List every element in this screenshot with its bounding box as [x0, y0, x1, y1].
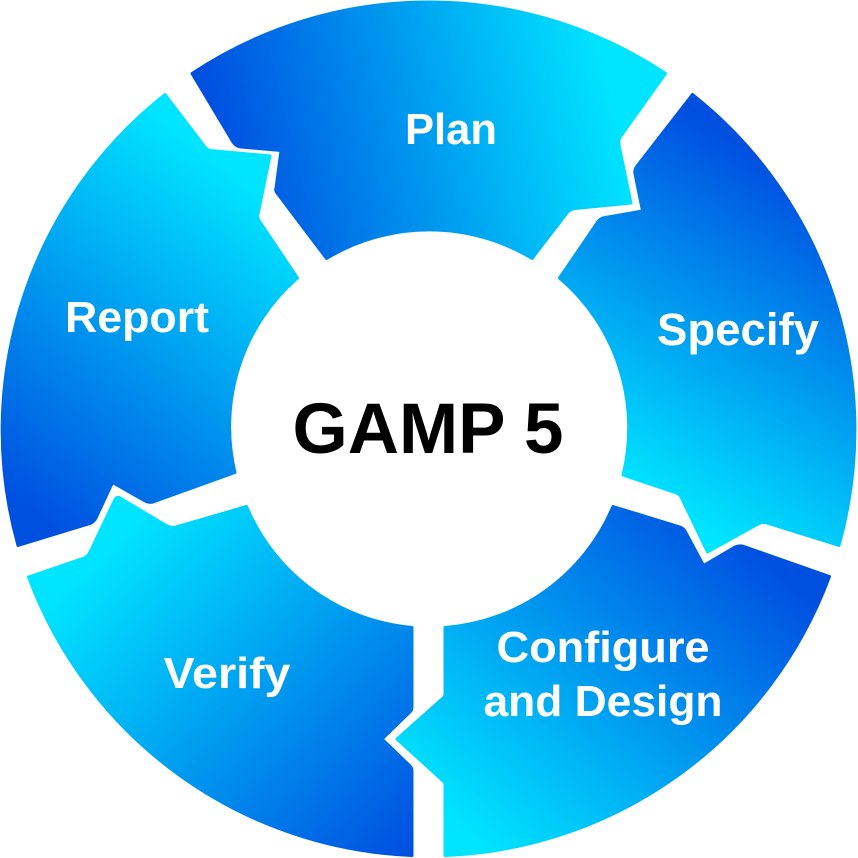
label: Plan: Plan [405, 105, 497, 154]
segment: Report [2, 94, 298, 546]
label line: Configure: Configure [496, 623, 710, 672]
center title: GAMP 5 [292, 390, 564, 469]
segment: Configure and Design [397, 506, 830, 856]
label: Configure and Design [484, 623, 722, 726]
segment: Plan [192, 2, 666, 259]
segment: Verify [28, 497, 412, 856]
segment: Specify [560, 94, 855, 552]
label line: and Design: and Design [484, 677, 722, 726]
label: Specify: Specify [657, 304, 819, 355]
label: Verify: Verify [164, 649, 291, 698]
label: Report: Report [65, 293, 209, 342]
